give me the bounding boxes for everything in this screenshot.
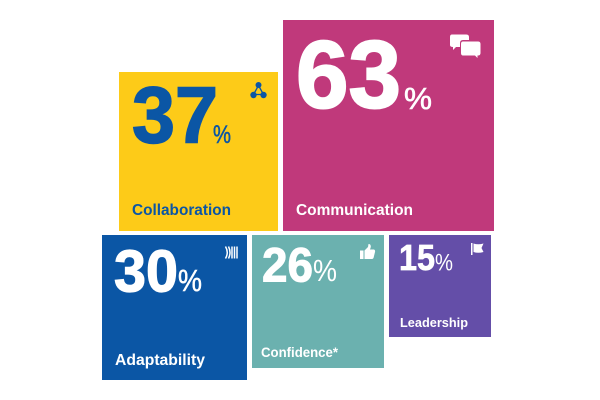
confidence percent sign: % [313, 253, 337, 288]
panel: collaboration [119, 70, 278, 231]
adaptability percent sign: % [178, 263, 202, 298]
icon: flag [471, 243, 484, 255]
communication label: Communication [296, 202, 413, 219]
collaboration percent sign: % [213, 121, 231, 149]
panel: adaptability [102, 235, 247, 380]
confidence label: Confidence* [261, 345, 339, 360]
collaboration label: Collaboration [132, 202, 231, 219]
icon: network [250, 82, 267, 98]
panel: leadership [389, 235, 491, 337]
adaptability label: Adaptability [115, 352, 205, 369]
icon: signal bars [226, 246, 237, 258]
communication percent sign: % [404, 81, 432, 116]
adaptability percentage: 30 [114, 238, 178, 304]
confidence percentage: 26 [262, 240, 313, 292]
panel: confidence [252, 235, 384, 368]
communication percentage: 63 [296, 22, 401, 128]
leadership label: Leadership [400, 315, 468, 330]
panel: communication [283, 20, 494, 231]
collaboration percentage: 37 [132, 70, 218, 160]
icon: thumbs up [360, 244, 375, 259]
leadership percentage: 15 [399, 237, 435, 278]
icon: speech bubbles [450, 34, 480, 58]
leadership percent sign: % [435, 250, 453, 276]
